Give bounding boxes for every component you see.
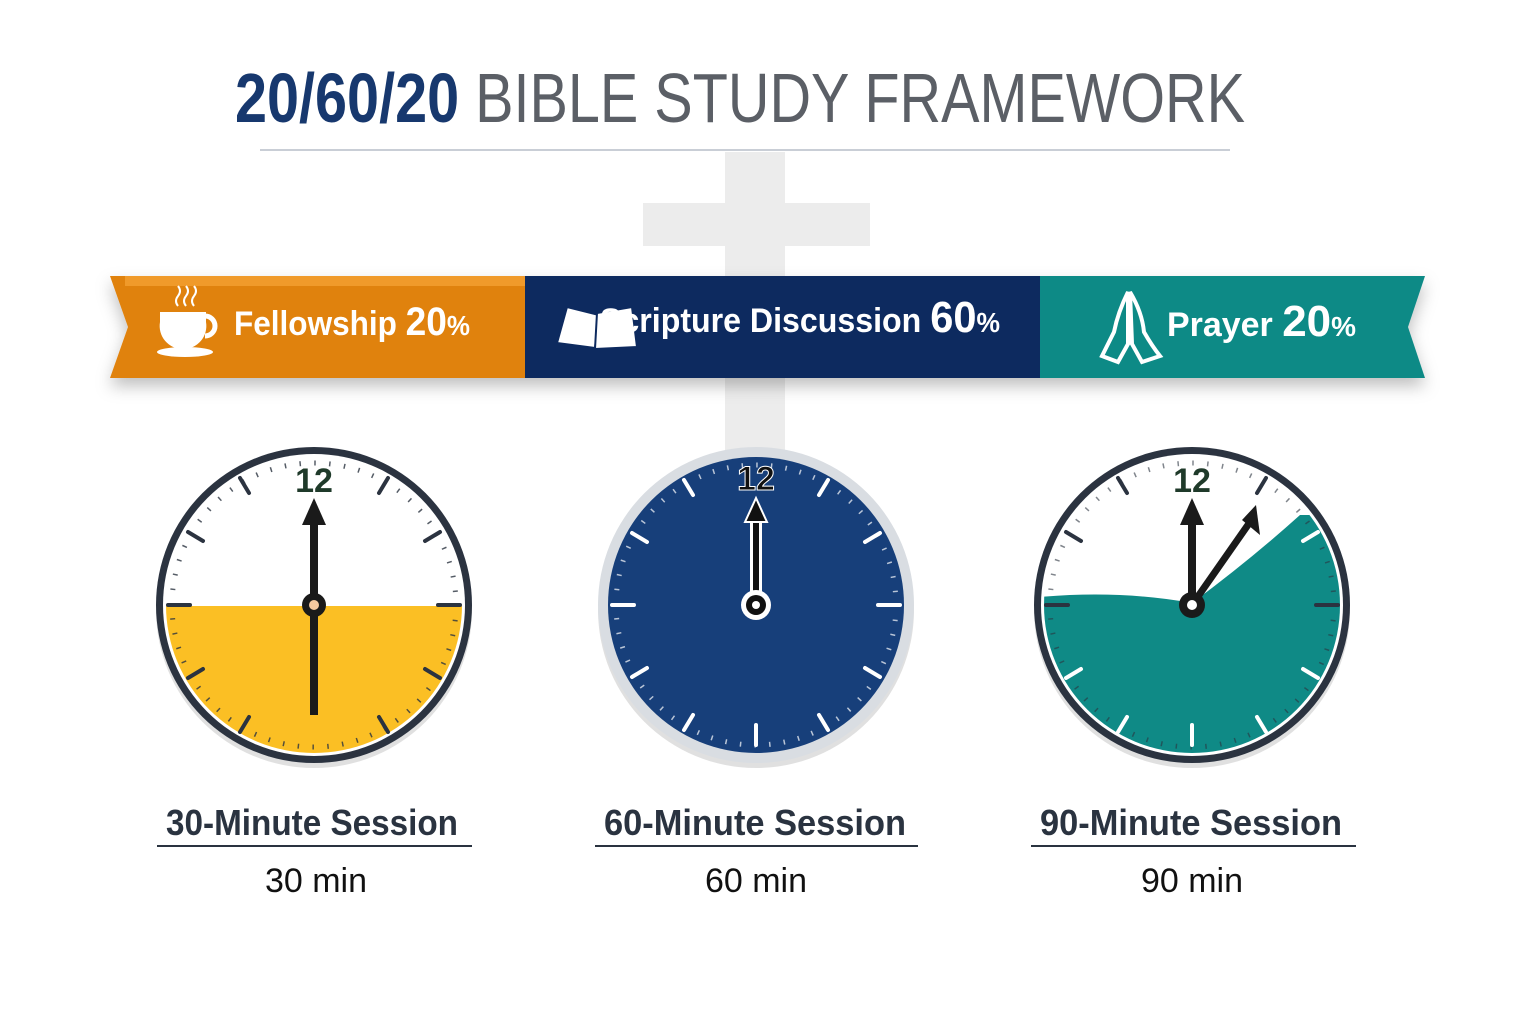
label: 60 minute xyxy=(595,802,918,900)
banner: fellowship xyxy=(110,276,525,378)
icon: praying hands xyxy=(1102,292,1160,362)
banner xyxy=(110,276,1425,378)
label: 90 minute: 90 min xyxy=(1141,862,1243,900)
clock: 90 minute xyxy=(1030,447,1360,770)
label: 60 minute: 60-Minute Session xyxy=(604,802,906,843)
label: 60 minute: 60 min xyxy=(705,862,807,900)
label: 30 minute: 30 min xyxy=(265,862,367,900)
label: 30 minute xyxy=(157,802,472,900)
banner: prayer: Prayer 20% xyxy=(1167,297,1356,346)
banner: scripture xyxy=(525,276,1040,378)
label: 90 minute: 90-Minute Session xyxy=(1040,802,1342,843)
cross background xyxy=(643,152,870,452)
clock: 60 minute xyxy=(598,447,914,768)
title: 20/60/20 BIBLE STUDY FRAMEWORK xyxy=(235,59,1245,137)
banner: prayer xyxy=(1040,276,1425,378)
label: 30 minute: 30-Minute Session xyxy=(166,802,458,843)
clock: 30 minute: 12 xyxy=(295,462,333,500)
icon: book xyxy=(557,307,637,349)
clock: 90 minute: 12 xyxy=(1173,462,1211,500)
banner: scripture: Scripture Discussion 60% xyxy=(600,293,1000,342)
icon: coffee cup xyxy=(157,286,215,357)
clock: 60 minute: 12 xyxy=(737,460,775,498)
banner: fellowship: Fellowship 20% xyxy=(234,300,470,344)
label: 90 minute xyxy=(1031,802,1356,900)
clock: 30 minute xyxy=(156,447,472,768)
